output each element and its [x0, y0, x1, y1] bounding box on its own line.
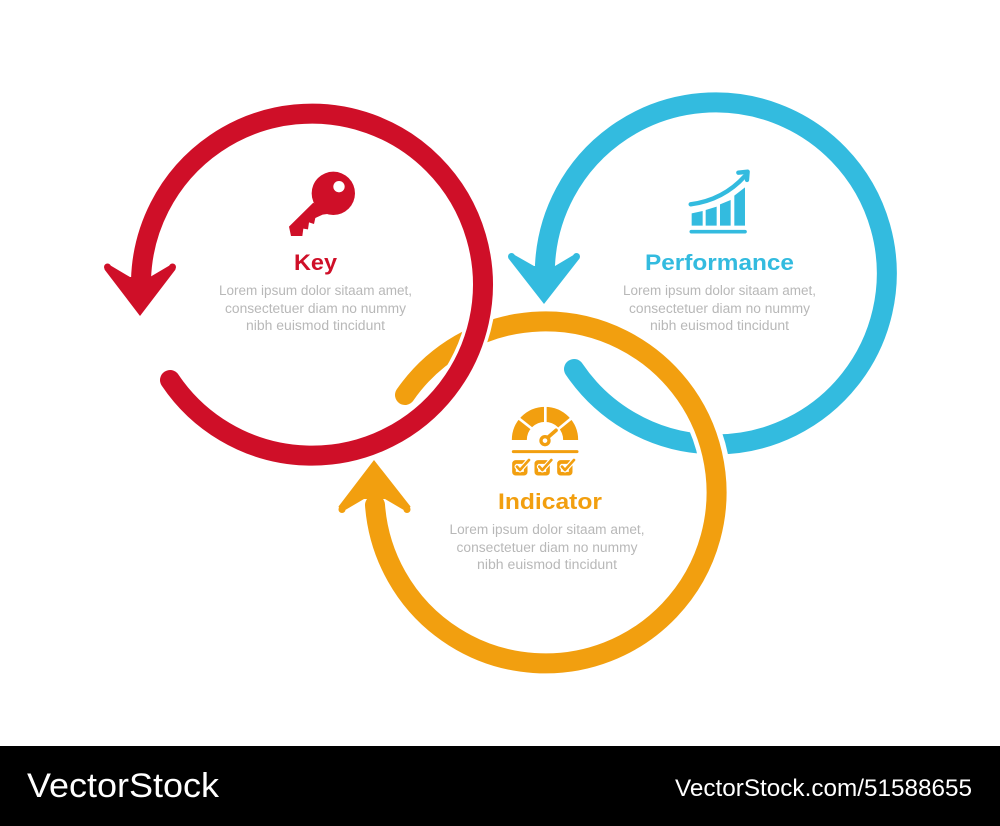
icon: growth chart — [691, 172, 748, 232]
icon: key — [289, 172, 355, 236]
orange circular arrow — [338, 321, 717, 663]
text block: Performance description: nibh euismod tincidunt — [650, 318, 789, 333]
text block: Indicator description: Lorem ipsum dolor sitaam amet, — [450, 522, 644, 537]
footer logo text: VectorStock — [27, 767, 220, 805]
heading: Indicator: Indicator — [498, 489, 602, 514]
text block: Key description: Lorem ipsum dolor sitaam amet, — [219, 283, 412, 298]
text block: Performance description: consectetuer diam no nummy — [629, 301, 810, 316]
blue circular arrow — [508, 102, 887, 444]
text block: Performance description: Lorem ipsum dolor sitaam amet, — [623, 283, 816, 298]
text block: Indicator description: consectetuer diam no nummy — [456, 540, 638, 555]
heading: Key: Key — [294, 250, 338, 275]
icon: gauge and checklist — [513, 405, 577, 474]
heading: Performance: Performance — [645, 250, 794, 275]
footer image reference: VectorStock.com/51588655 — [675, 775, 972, 802]
text block: Performance description — [623, 283, 816, 333]
text block: Key description: consectetuer diam no nummy — [225, 301, 406, 316]
text block: Key description — [219, 283, 412, 333]
footer band — [0, 746, 1000, 826]
text block: Indicator description: nibh euismod tincidunt — [477, 557, 617, 572]
text block: Key description: nibh euismod tincidunt — [246, 318, 385, 333]
text block: Indicator description — [450, 522, 644, 572]
red circular arrow — [104, 114, 483, 456]
